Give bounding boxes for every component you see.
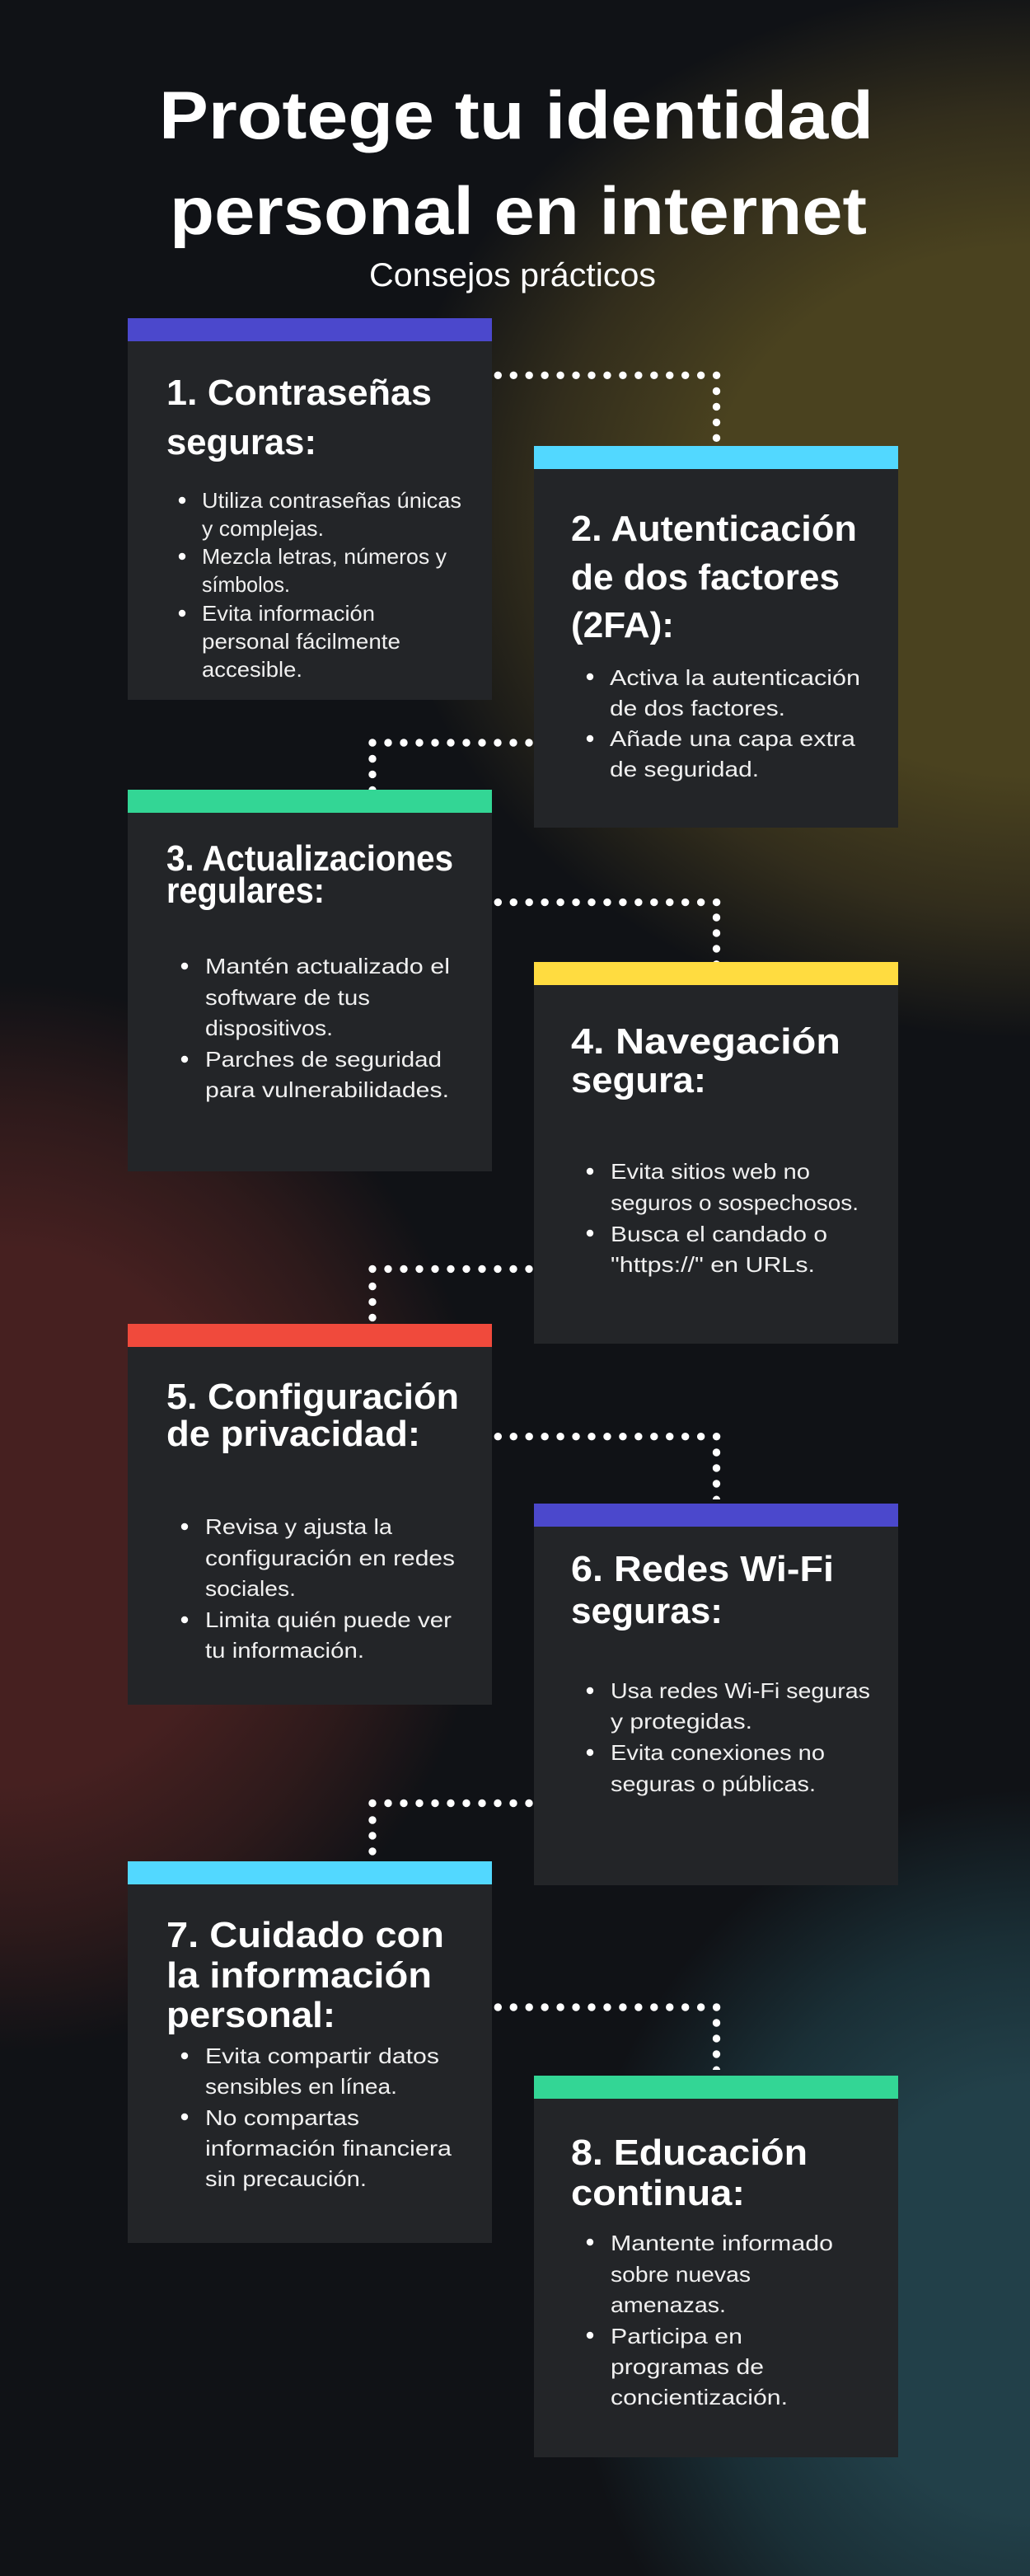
heading 1: 1. Contraseñas [166, 373, 432, 413]
list 6: Evita conexiones no [611, 1740, 825, 1765]
panel: 6 redes wi-fi seguras [534, 1504, 898, 1885]
connector: step 4 to step 5 [372, 1269, 530, 1318]
list 5: sociales. [205, 1576, 296, 1601]
panel: 5 configuración de privacidad [128, 1324, 492, 1705]
list 1: Evita información [202, 601, 375, 626]
list 8: Mantente informado [611, 2231, 833, 2255]
list 3: Parches de seguridad [205, 1047, 442, 1072]
list 1 [179, 488, 461, 682]
connector: step 2 to step 3 [372, 743, 530, 800]
heading 3 [166, 838, 453, 911]
list 6 [587, 1678, 870, 1796]
list 3 [181, 954, 450, 1102]
list 8: amenazas. [611, 2292, 726, 2317]
panel: 7 cuidado con la información personal [128, 1861, 492, 2243]
list 7: sensibles en línea. [205, 2074, 397, 2099]
heading 5: de privacidad: [166, 1414, 420, 1454]
list 2: de dos factores. [610, 696, 785, 720]
list 6: seguras o públicas. [611, 1771, 816, 1796]
accent bar 7 [128, 1861, 492, 1884]
panel: 2 autenticación de dos factores [534, 446, 898, 828]
list 1: símbolos. [202, 572, 290, 597]
list 1: y complejas. [202, 516, 324, 541]
list 1: Mezcla letras, números y [202, 544, 447, 569]
list 8: sobre nuevas [611, 2262, 751, 2287]
heading 1 [166, 373, 432, 462]
heading 5: 5. Configuración [166, 1377, 459, 1417]
panel: 4 navegación segura [534, 962, 898, 1344]
list 5: Revisa y ajusta la [205, 1514, 393, 1539]
heading 7 [166, 1915, 444, 2035]
list 4: seguros o sospechosos. [611, 1190, 859, 1215]
list 1: accesible. [202, 657, 302, 682]
accent bar 4 [534, 962, 898, 985]
accent bar 5 [128, 1324, 492, 1347]
accent bar 8 [534, 2076, 898, 2099]
list 2: Añade una capa extra [610, 726, 856, 751]
heading 3: 3. Actualizaciones [166, 838, 453, 879]
heading 2: de dos factores [571, 557, 840, 598]
heading 6 [571, 1549, 834, 1631]
heading 7: 7. Cuidado con [166, 1915, 444, 1955]
accent bar 1 [128, 318, 492, 341]
list 4: "https://" en URLs. [611, 1252, 815, 1277]
list 8: concientización. [611, 2385, 788, 2409]
list 7: No compartas [205, 2105, 359, 2130]
list 2: Activa la autenticación [610, 665, 860, 690]
heading 2: 2. Autenticación [571, 509, 857, 549]
connector: step 3 to step 4 [498, 903, 719, 969]
heading 6: 6. Redes Wi-Fi [571, 1549, 834, 1589]
connector: step 6 to step 7 [372, 1804, 530, 1851]
list 4: Evita sitios web no [611, 1159, 810, 1184]
list 7: sin precaución. [205, 2166, 367, 2191]
heading 2: (2FA): [571, 605, 674, 645]
list 7: Evita compartir datos [205, 2043, 439, 2068]
list 7 [181, 2043, 452, 2191]
list 3: dispositivos. [205, 1016, 333, 1040]
list 2 [587, 665, 860, 781]
heading 4: segura: [571, 1060, 706, 1100]
heading 8 [571, 2133, 808, 2213]
connector: step 7 to step 8 [498, 2007, 720, 2070]
heading 6: seguras: [571, 1591, 723, 1631]
list 7: información financiera [205, 2136, 452, 2161]
heading 8: 8. Educación [571, 2133, 808, 2173]
heading 8: continua: [571, 2173, 745, 2213]
heading 4: 4. Navegación [571, 1021, 840, 1062]
heading 1: seguras: [166, 422, 316, 462]
list 5: configuración en redes [205, 1546, 455, 1570]
heading 7: personal: [166, 1995, 335, 2035]
heading 7: la información [166, 1955, 432, 1996]
list 6: Usa redes Wi-Fi seguras [611, 1678, 870, 1703]
panel: 1 contraseñas seguras [128, 318, 492, 700]
list 1: Utiliza contraseñas únicas [202, 488, 461, 513]
heading 5 [166, 1377, 459, 1454]
connector: step 5 to step 6 [498, 1437, 720, 1499]
heading 3: regulares: [166, 870, 325, 911]
accent bar 3 [128, 790, 492, 813]
title: personal en internet [170, 174, 867, 249]
list 8 [587, 2231, 833, 2409]
subtitle: Consejos prácticos [369, 257, 656, 293]
title [159, 78, 873, 249]
connector: step 1 to step 2 [498, 375, 719, 439]
list 8: programas de [611, 2354, 764, 2379]
heading 4 [571, 1021, 840, 1100]
list 4 [587, 1159, 859, 1277]
list 2: de seguridad. [610, 757, 759, 781]
heading 2 [571, 509, 857, 645]
panel: 3 actualizaciones regulares [128, 790, 492, 1171]
accent bar 6 [534, 1504, 898, 1527]
list 3: Mantén actualizado el [205, 954, 450, 978]
accent bar 2 [534, 446, 898, 469]
list 3: para vulnerabilidades. [205, 1077, 449, 1102]
list 1: personal fácilmente [202, 629, 400, 654]
panel: 8 educación continua [534, 2076, 898, 2457]
list 5: Limita quién puede ver [205, 1607, 452, 1632]
list 4: Busca el candado o [611, 1222, 827, 1246]
list 6: y protegidas. [611, 1709, 752, 1734]
title: Protege tu identidad [159, 78, 873, 153]
list 5 [181, 1514, 455, 1663]
list 3: software de tus [205, 985, 370, 1010]
list 8: Participa en [611, 2324, 742, 2348]
list 5: tu información. [205, 1638, 364, 1663]
